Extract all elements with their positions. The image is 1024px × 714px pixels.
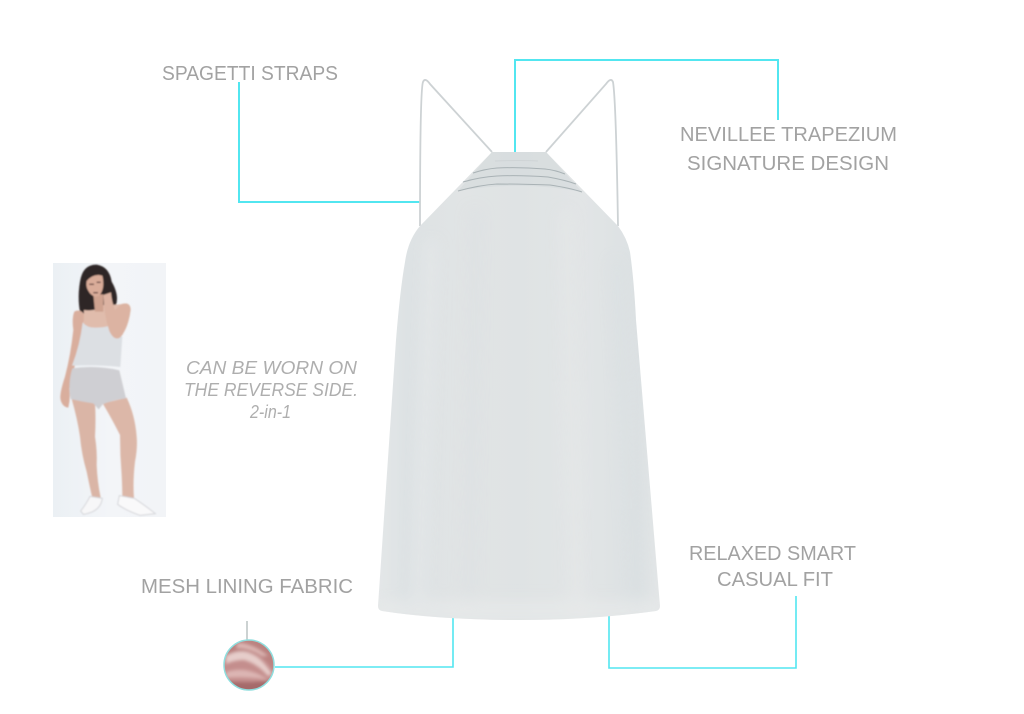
left arm	[60, 311, 85, 408]
label: mesh lining fabric: MESH LINING FABRIC	[141, 576, 353, 598]
pleat panel shading	[458, 152, 582, 192]
face	[85, 274, 103, 297]
label: trapezium signature design: NEVILLEE TRAPEZIUM	[680, 124, 897, 146]
right arm	[103, 292, 131, 338]
leader line: mesh lining	[275, 618, 453, 667]
left strap	[420, 80, 492, 226]
garment: spaghetti strap top	[378, 80, 660, 622]
note: reversible	[184, 358, 358, 422]
shorts	[69, 367, 126, 409]
label: spagetti straps: SPAGETTI STRAPS	[162, 63, 338, 85]
model photo	[53, 263, 166, 517]
right strap	[546, 80, 618, 226]
tank top	[72, 322, 122, 367]
hair fringe	[83, 270, 105, 305]
note: reversible: 2-in-1	[249, 402, 291, 422]
top body	[378, 152, 660, 620]
connector: fabric swatch to label	[246, 621, 248, 640]
neckline pleats	[458, 160, 582, 192]
back leg	[72, 399, 101, 498]
right shoe	[118, 496, 155, 515]
front leg	[103, 398, 137, 498]
label: trapezium signature design	[680, 124, 897, 175]
fabric folds	[452, 616, 610, 618]
leader line: relaxed fit	[609, 596, 796, 668]
chest skin	[83, 303, 127, 335]
eyes and lips	[89, 282, 101, 293]
label: trapezium signature design: SIGNATURE DESIGN	[687, 153, 889, 175]
note: reversible: CAN BE WORN ON	[186, 358, 358, 378]
label: relaxed smart casual fit: RELAXED SMART	[689, 543, 856, 565]
label: relaxed smart casual fit	[689, 543, 856, 591]
hair back	[79, 265, 117, 319]
leader line: trapezium design	[515, 60, 778, 152]
neck	[93, 294, 103, 312]
left shoe	[81, 496, 102, 514]
label: relaxed smart casual fit: CASUAL FIT	[717, 569, 833, 591]
leader line: spaghetti straps	[239, 82, 420, 202]
note: reversible: THE REVERSE SIDE.	[184, 380, 358, 400]
icon: fabric swatch	[224, 640, 274, 692]
